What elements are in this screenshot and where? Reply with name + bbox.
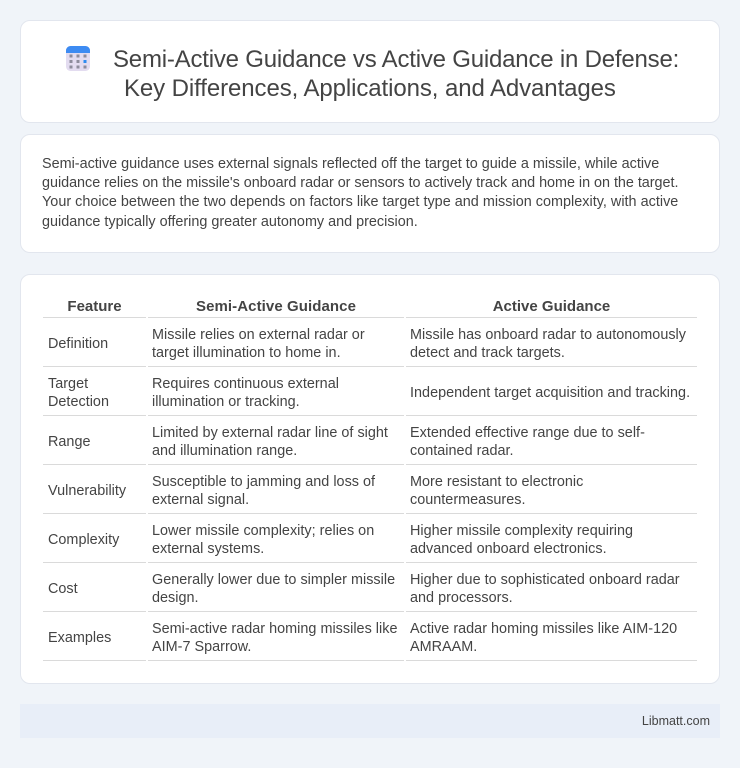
row: Definition	[48, 327, 686, 361]
intro text line 3: Your choice between the two depends on factors like target type and mission complexity, with active	[42, 194, 678, 210]
row: Cost: Higher due to sophisticated onboard radar	[410, 572, 680, 588]
row: Range	[48, 425, 645, 459]
row: Target Detection: Independent target acquisition and tracking.	[410, 385, 690, 401]
table header: Active Guidance: Active Guidance	[493, 298, 610, 315]
title: Semi-Active Guidance vs Active Guidance in Defense:	[113, 46, 679, 73]
panel: comparison table card	[20, 274, 720, 684]
row: Complexity: Higher missile complexity requiring	[410, 523, 633, 539]
table header: Feature: Feature	[67, 298, 122, 315]
row: Range: contained radar.	[410, 443, 514, 459]
row: Target Detection: Target	[48, 376, 88, 392]
row: Cost: and processors.	[410, 590, 513, 606]
row: Definition: Definition	[48, 336, 108, 352]
row: Range: Limited by external radar line of sight	[152, 425, 388, 441]
row: Examples: Active radar homing missiles like AIM-120	[410, 621, 677, 637]
row: Complexity	[48, 523, 633, 557]
row: Target Detection	[48, 376, 690, 410]
row: Examples: AIM-7 Sparrow.	[152, 639, 251, 655]
row: Complexity: advanced onboard electronics.	[410, 541, 607, 557]
panel: title card	[20, 20, 720, 123]
footer bar	[20, 704, 720, 738]
row: Vulnerability: external signal.	[152, 492, 249, 508]
row: Definition: Missile relies on external radar or	[152, 327, 365, 343]
title line 2: Key Differences, Applications, and Advantages	[124, 75, 616, 102]
row: Vulnerability: More resistant to electronic	[410, 474, 583, 490]
intro text line 2: guidance relies on the missile's onboard radar or sensors to actively track and home in on the target.	[42, 175, 678, 191]
row: Complexity: Complexity	[48, 532, 119, 548]
row: Complexity: external systems.	[152, 541, 264, 557]
row: Cost: Generally lower due to simpler missile	[152, 572, 395, 588]
row: Examples: AMRAAM.	[410, 639, 477, 655]
row: Definition: Missile has onboard radar to autonomously	[410, 327, 686, 343]
row: Range: Extended effective range due to self-	[410, 425, 645, 441]
row: Range: Range	[48, 434, 91, 450]
row: Definition: detect and track targets.	[410, 345, 565, 361]
footer text: Libmatt.com: Libmatt.com	[642, 714, 710, 728]
table header: Semi-Active Guidance: Semi-Active Guidance	[196, 298, 356, 315]
panel: intro card	[20, 134, 720, 253]
row: Cost: Cost	[48, 581, 78, 597]
row: Examples: Examples	[48, 630, 111, 646]
row: Vulnerability	[48, 474, 583, 508]
row: Examples	[48, 621, 677, 655]
row: Cost	[48, 572, 680, 606]
row: Complexity: Lower missile complexity; relies on	[152, 523, 374, 539]
row: Target Detection: illumination or tracking.	[152, 394, 300, 410]
intro text line 1: Semi-active guidance uses external signals reflected off the target to guide a missile, while active	[42, 156, 659, 172]
intro text line 4: guidance typically offering greater autonomy and precision.	[42, 214, 418, 230]
row: Vulnerability: countermeasures.	[410, 492, 526, 508]
row: Definition: target illumination to home in.	[152, 345, 341, 361]
row: Vulnerability: Susceptible to jamming and loss of	[152, 474, 375, 490]
row: Target Detection: Detection	[48, 394, 109, 410]
row: Target Detection: Requires continuous external	[152, 376, 339, 392]
row: Examples: Semi-active radar homing missiles like	[152, 621, 397, 637]
icon: calendar	[66, 46, 90, 71]
row: Cost: design.	[152, 590, 199, 606]
row: Vulnerability: Vulnerability	[48, 483, 126, 499]
row: Range: and illumination range.	[152, 443, 297, 459]
